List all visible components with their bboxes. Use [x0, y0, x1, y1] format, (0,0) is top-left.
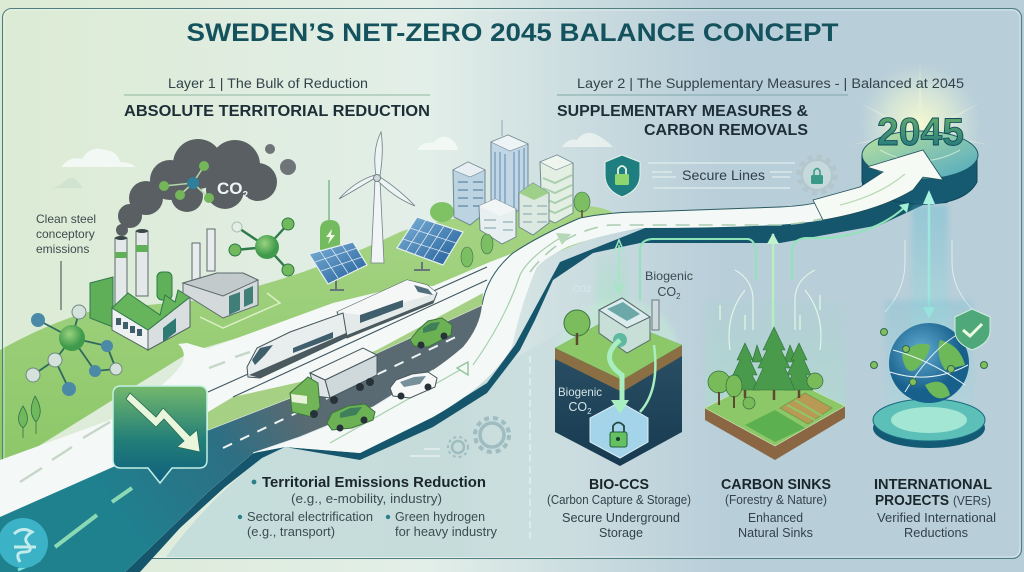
CO2 label: CO [217, 179, 242, 198]
text block: territorial emissions reduction: Green hydrogen [395, 510, 485, 524]
road connector glows [596, 203, 909, 336]
text block: bio-ccs: BIO-CCS [589, 476, 649, 493]
icon: logo badge [0, 518, 48, 568]
pine trees [730, 327, 813, 390]
text block: international projects: (VERs) [953, 494, 991, 508]
label: biogenic CO2 lower: Biogenic [558, 385, 602, 399]
white ribbon surface [0, 150, 943, 572]
text block: bio-ccs: Secure Underground [562, 511, 680, 525]
icon: emissions down arrow sign [113, 386, 207, 483]
text block: bio-ccs: (Carbon Capture & Storage) [547, 493, 691, 507]
icon: high-speed train [247, 280, 437, 378]
icon: international globe [870, 300, 990, 448]
text block: international projects: PROJECTS [875, 492, 949, 509]
shield check [955, 309, 990, 350]
icon: city buildings [430, 120, 590, 267]
arrow head [813, 150, 943, 220]
ribbon guide line [330, 238, 560, 443]
heading: layer 2: Layer 2 | The Supplementary Measures - | Balanced at 2045 [577, 75, 964, 91]
storage with lock [590, 400, 648, 458]
text block: carbon sinks [721, 476, 831, 540]
icon: green car bottom [327, 404, 375, 432]
text block: territorial emissions reduction: Territorial Emissions Reduction [262, 474, 486, 491]
ribbon dashes [530, 200, 872, 272]
icon: left molecule [26, 305, 122, 396]
text block: territorial emissions reduction: (e.g., transport) [247, 525, 335, 539]
label: biogenic CO2 upper: 2 [676, 292, 681, 301]
2045 goal platform [813, 62, 990, 220]
icon: gears [410, 418, 509, 457]
label: biogenic CO2 lower: 2 [587, 407, 592, 416]
main road with lanes [0, 305, 482, 572]
label: biogenic CO2 upper: Biogenic [645, 269, 693, 283]
field [780, 393, 832, 424]
round trees [708, 371, 823, 409]
heading: layer 1 [124, 75, 430, 120]
text block: carbon sinks: CARBON SINKS [721, 476, 831, 493]
ribbon upper edge [482, 187, 860, 305]
text block: carbon sinks: (Forestry & Nature) [725, 493, 827, 507]
secure lines: Secure Lines [682, 167, 765, 183]
icon: mid molecule [229, 218, 294, 276]
CO2 label: 2 [242, 190, 248, 201]
icon: truck [290, 348, 377, 418]
divider [529, 356, 531, 540]
sun glow [850, 62, 990, 187]
text block: carbon sinks: Enhanced [748, 511, 803, 525]
heading: layer 2: CARBON REMOVALS [644, 122, 808, 139]
text block: territorial emissions reduction: (e.g., e-mobility, industry) [291, 491, 442, 506]
icon: green car top [410, 318, 452, 348]
label: biogenic CO2 upper: CO [657, 285, 676, 299]
icon: shield with lock [605, 155, 640, 197]
text block: territorial emissions reduction [238, 474, 498, 539]
title: SWEDEN’S NET-ZERO 2045 BALANCE CONCEPT [186, 19, 838, 47]
chimney smoke cloud with CO2 [116, 139, 296, 236]
text block: international projects: INTERNATIONAL [874, 476, 992, 493]
text block: international projects [874, 476, 996, 540]
icon: solar panel 2 [397, 217, 463, 270]
icon: solar panel 1 [309, 242, 367, 290]
label 2045: 2045 [877, 111, 964, 154]
text block: international projects: Verified International [877, 511, 996, 525]
icon: steel factory [90, 229, 190, 350]
label: biogenic CO2 upper [645, 269, 693, 301]
label: biogenic CO2 lower: CO [568, 400, 587, 414]
heading: layer 1: ABSOLUTE TERRITORIAL REDUCTION [124, 103, 430, 120]
text block: carbon sinks: Natural Sinks [738, 526, 813, 540]
text block: territorial emissions reduction: for heavy industry [395, 525, 498, 539]
heading: layer 2 [557, 75, 964, 139]
green verge [208, 293, 483, 430]
heading: layer 2: SUPPLEMENTARY MEASURES & [557, 103, 808, 120]
callout: clean steel: Clean steel [36, 212, 96, 226]
icon: green battery [320, 180, 340, 250]
text block: bio-ccs: Storage [599, 526, 643, 540]
text block: bio-ccs [547, 476, 691, 540]
icon: gear with lock [799, 157, 835, 193]
icon: wind turbine [339, 132, 415, 263]
secure lines [648, 163, 795, 188]
vertical arrow to 2045 [885, 190, 975, 335]
green land [0, 205, 612, 470]
heading: layer 1: Layer 1 | The Bulk of Reduction [168, 75, 368, 91]
ribbon side shadow [125, 155, 977, 572]
callout: clean steel: conceptory [36, 227, 95, 241]
train tracks [208, 267, 487, 397]
text block: international projects: Reductions [904, 526, 968, 540]
callout: clean steel: emissions [36, 242, 89, 256]
icon: grey factory [183, 229, 280, 328]
icon: white car [390, 372, 437, 400]
facility [599, 298, 659, 353]
icon: bio-ccs block [555, 298, 682, 466]
cloud molecule [159, 161, 214, 203]
icon: trees left [18, 396, 40, 438]
clouds [52, 133, 613, 188]
label: faint CO2: CO2 [573, 284, 591, 294]
main pathway ribbon [0, 150, 977, 572]
callout: clean steel [36, 212, 96, 310]
icon: carbon sinks forest [705, 270, 845, 460]
panel: territorial reduction text background [166, 310, 600, 557]
label: biogenic CO2 lower [558, 385, 602, 416]
text block: territorial emissions reduction: Sectoral electrification [247, 510, 373, 524]
